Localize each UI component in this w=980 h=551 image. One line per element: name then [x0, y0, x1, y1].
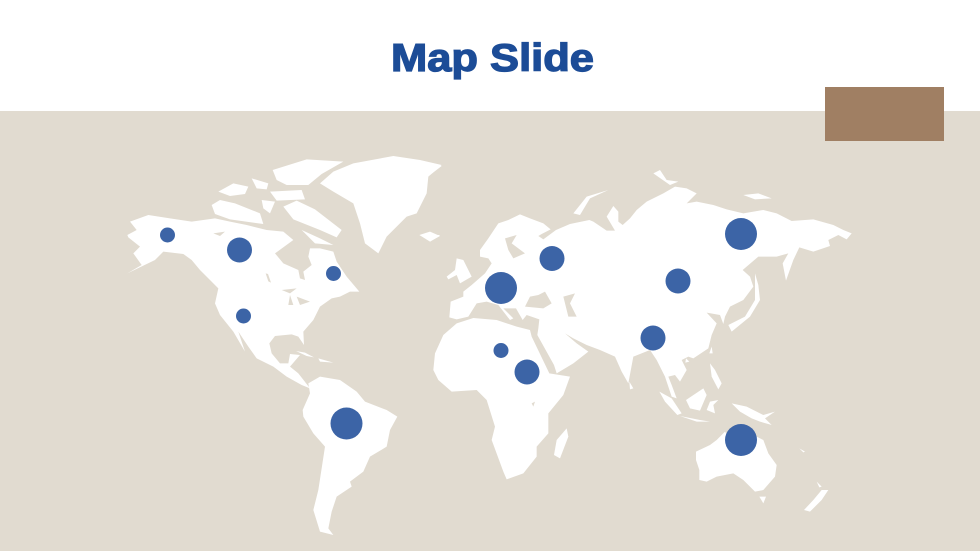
marker: Brazil — [330, 408, 362, 440]
map: Southeast Asia and Oceania — [629, 347, 828, 512]
marker: Sudan — [514, 360, 540, 384]
marker: Alaska — [160, 228, 175, 242]
marker: Australia — [725, 424, 757, 456]
map: South America, Africa and Caribbean — [296, 318, 570, 535]
marker: western Canada — [227, 238, 252, 262]
marker: South Asia — [640, 326, 666, 350]
brown accent rectangle — [825, 87, 944, 141]
panel: tan map background — [0, 111, 980, 551]
world map — [127, 156, 852, 535]
marker: North Africa — [494, 343, 508, 358]
marker: eastern Canada — [326, 266, 341, 281]
marker: eastern Europe — [540, 246, 564, 271]
data markers — [160, 218, 757, 456]
marker: Mongolia — [666, 268, 690, 294]
map: North America and Greenland — [127, 156, 442, 388]
marker: western Europe — [485, 272, 517, 304]
map: Eurasia — [430, 165, 852, 398]
marker: Siberia — [725, 218, 757, 250]
marker: western United States — [236, 308, 251, 324]
title: Map Slide — [391, 37, 594, 80]
